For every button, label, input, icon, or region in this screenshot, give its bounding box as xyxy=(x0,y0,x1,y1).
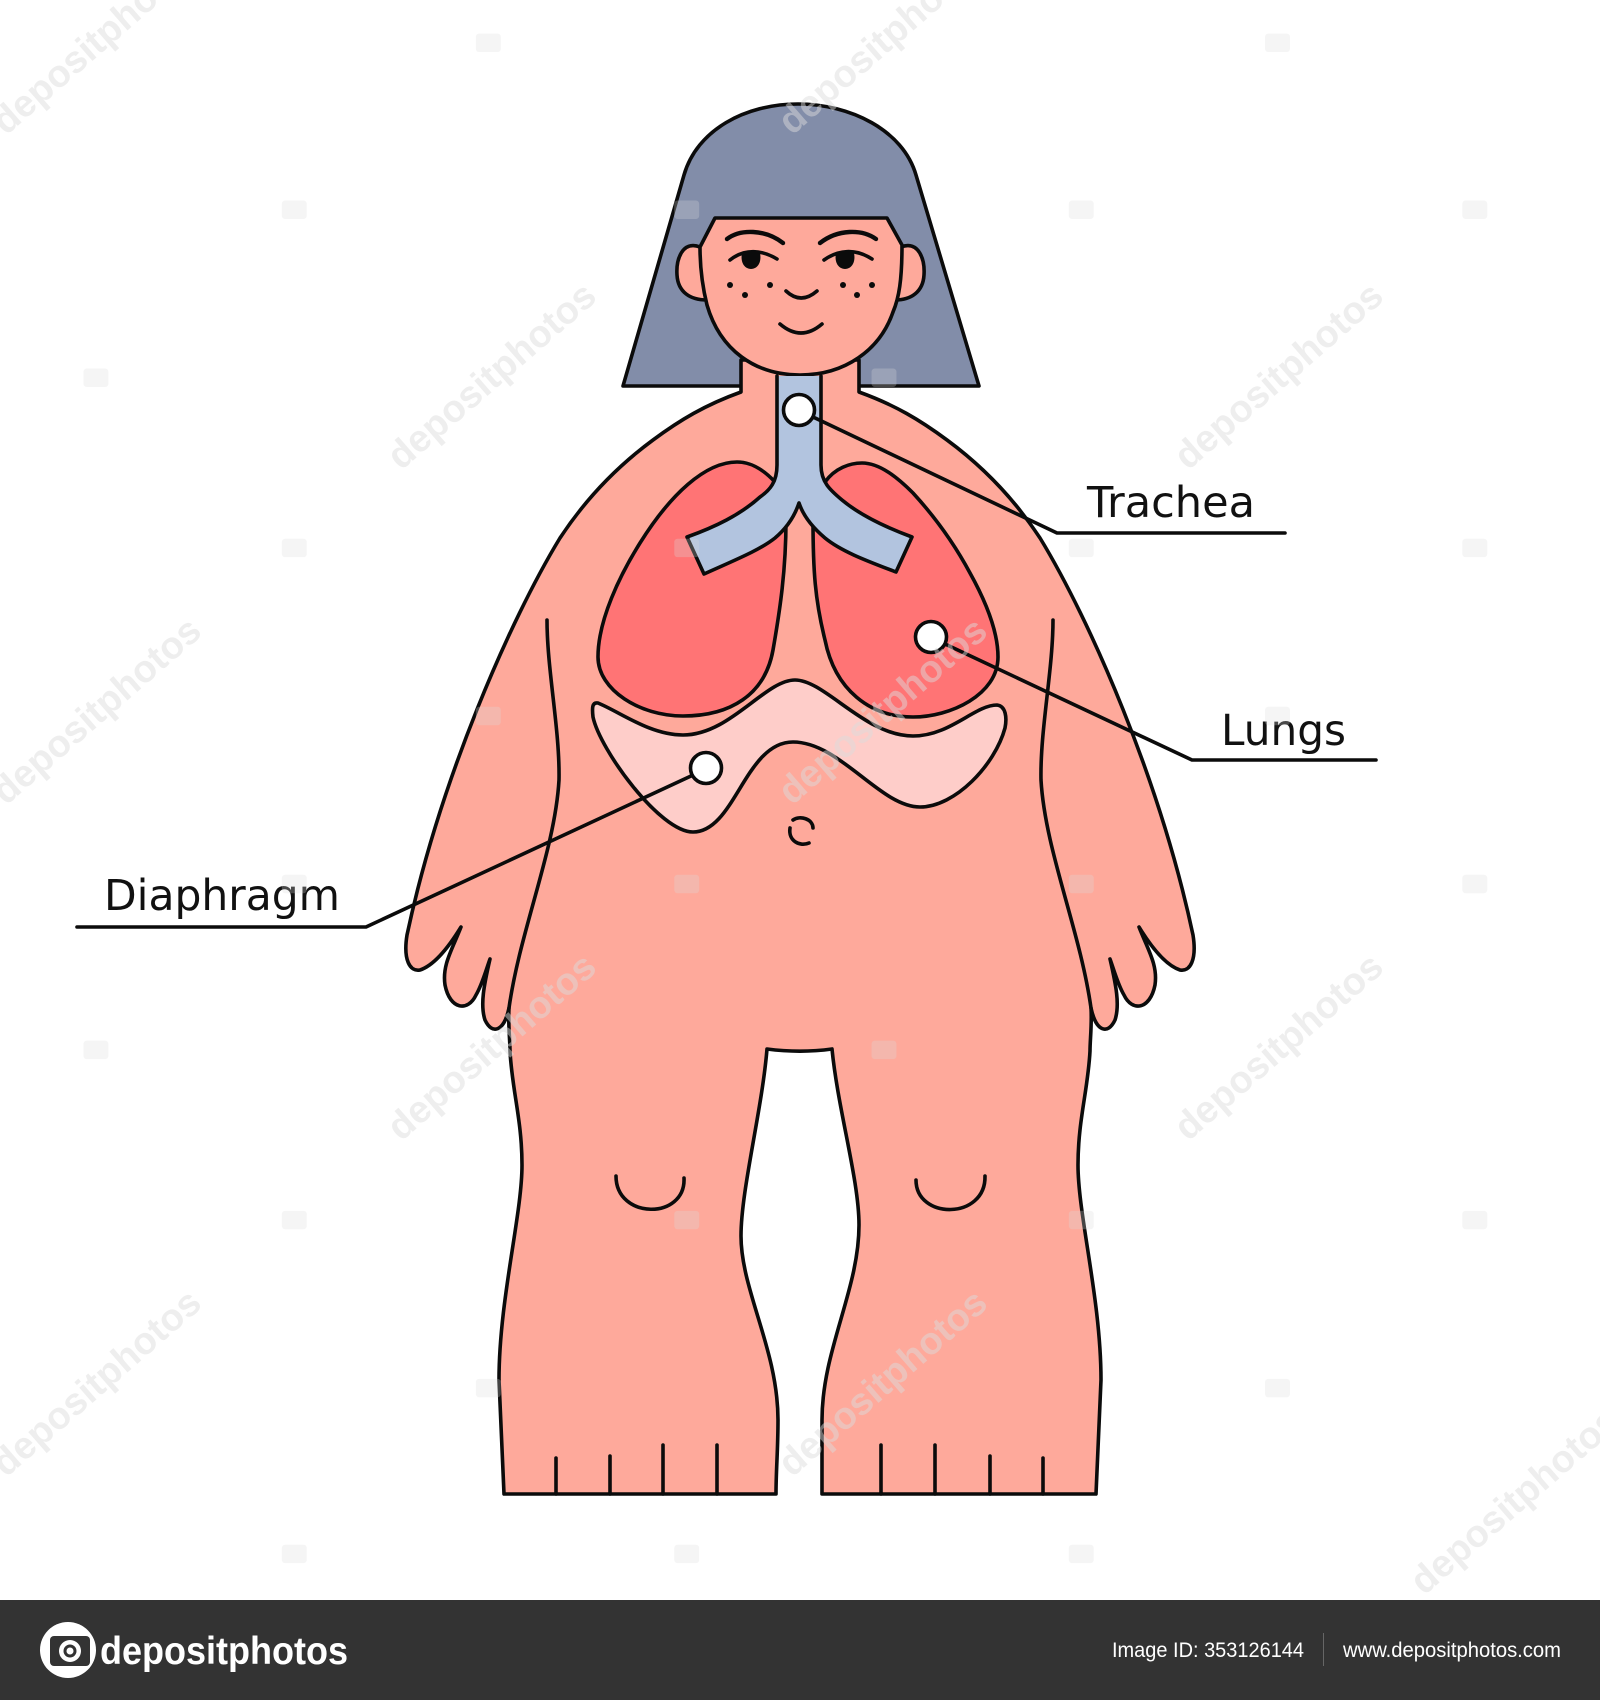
watermarks: depositphotos xyxy=(1166,945,1391,1149)
trachea and bronchi xyxy=(687,376,912,574)
left toes xyxy=(556,1445,717,1494)
right knee xyxy=(916,1176,985,1210)
label: Lungs: Lungs xyxy=(1221,706,1346,756)
left knee xyxy=(616,1176,684,1209)
right ear xyxy=(895,246,924,300)
navel xyxy=(790,818,813,844)
right eye xyxy=(824,252,872,269)
watermarks: depositphotos xyxy=(770,609,995,813)
logo icon: camera xyxy=(40,1622,96,1678)
watermarks: depositphotos xyxy=(770,1281,995,1485)
mouth xyxy=(780,324,822,333)
label: Trachea xyxy=(784,394,1285,533)
left eyebrow xyxy=(727,232,783,243)
left lung xyxy=(598,462,786,716)
right arm inner line xyxy=(1041,620,1091,1008)
watermarks: depositphotos xyxy=(1166,274,1391,478)
left eye xyxy=(730,252,777,269)
watermarks: depositphotos xyxy=(379,274,604,478)
freckles xyxy=(727,282,875,298)
divider xyxy=(1323,1633,1324,1666)
hair xyxy=(623,104,979,386)
left arm inner line xyxy=(509,620,559,1008)
diaphragm xyxy=(593,680,1006,832)
website: www.depositphotos.com xyxy=(1342,1639,1561,1662)
left ear xyxy=(677,246,707,300)
nose xyxy=(786,291,817,298)
image id: Image ID: 353126144 xyxy=(1112,1639,1304,1662)
label: Trachea: Trachea xyxy=(1086,478,1255,528)
label: Diaphragm: Diaphragm xyxy=(104,871,340,921)
watermarks: depositphotos xyxy=(379,945,604,1149)
face xyxy=(700,218,902,375)
right eyebrow xyxy=(820,232,876,243)
right lung xyxy=(813,463,998,717)
watermark camera icons xyxy=(83,34,1487,1563)
logo wordmark: depositphotos xyxy=(100,1630,348,1673)
label: Lungs xyxy=(916,622,1376,760)
body xyxy=(406,360,1194,1494)
label: Diaphragm xyxy=(77,752,722,927)
figure: woman with respiratory organs xyxy=(406,104,1194,1494)
right toes xyxy=(881,1445,1043,1494)
footer banner xyxy=(0,1600,1600,1700)
